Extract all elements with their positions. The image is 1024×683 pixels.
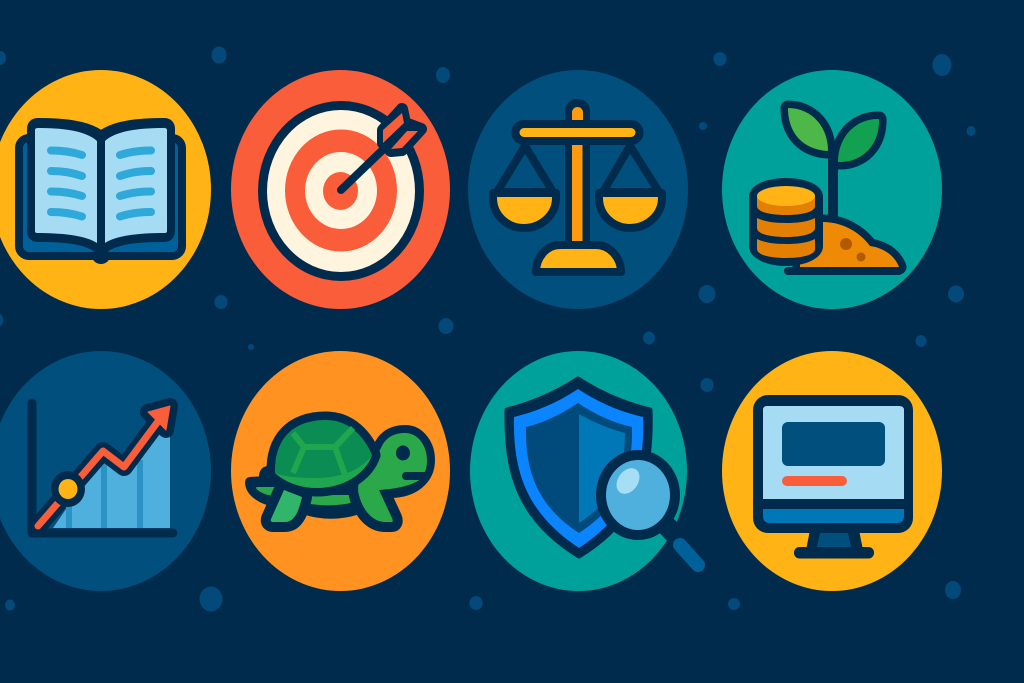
icon: computer monitor: [722, 351, 942, 591]
icon: plant and coins: [722, 70, 942, 309]
icon: target with arrow: [231, 70, 450, 309]
icon: open book: [0, 70, 211, 309]
icon: shield and magnifying glass: [470, 351, 698, 591]
icon: turtle: [231, 351, 450, 591]
icon: rising line chart: [0, 351, 211, 591]
icon: balance scale: [468, 70, 688, 309]
